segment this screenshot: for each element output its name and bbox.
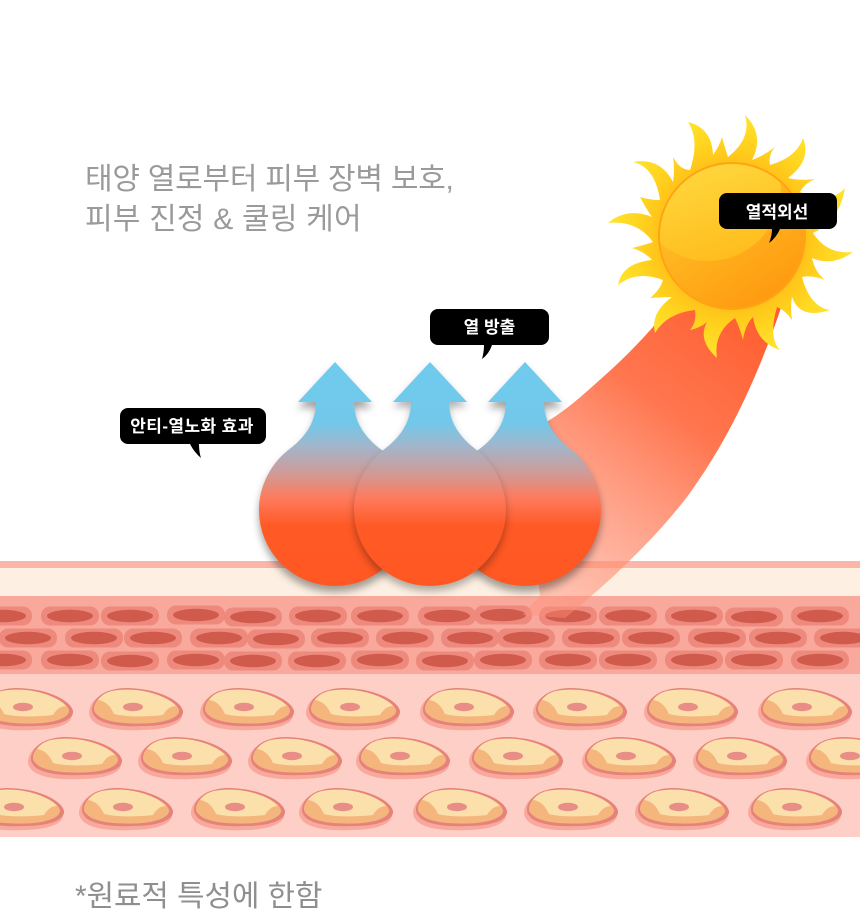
callout: anti heat aging (120, 408, 266, 458)
epidermis layer (0, 568, 860, 596)
heading line 2: 피부 진정 & 쿨링 케어 (85, 203, 362, 236)
panel: skin cross-section (0, 561, 860, 837)
sun rays (608, 115, 853, 358)
callout: anti heat aging: 안티-열노화 효과 (130, 417, 254, 436)
icon: sun (608, 115, 853, 358)
sun disc (658, 162, 806, 310)
skin surface band (0, 561, 860, 568)
dermis layer (0, 674, 860, 837)
left droplet arrow (259, 362, 411, 586)
callout: heat release (430, 309, 549, 359)
callout: infrared (719, 193, 837, 243)
muscle layer (0, 596, 860, 674)
heat-release droplet arrows (259, 362, 601, 586)
sun highlight (660, 164, 781, 261)
callout: infrared: 열적외선 (746, 203, 808, 222)
centre droplet arrow (354, 362, 506, 586)
infrared beam (522, 270, 782, 618)
callout: heat release: 열 방출 (464, 318, 515, 337)
right droplet arrow (449, 362, 601, 586)
heading: 태양 열로부터 피부 장벽 보호, (85, 163, 454, 196)
